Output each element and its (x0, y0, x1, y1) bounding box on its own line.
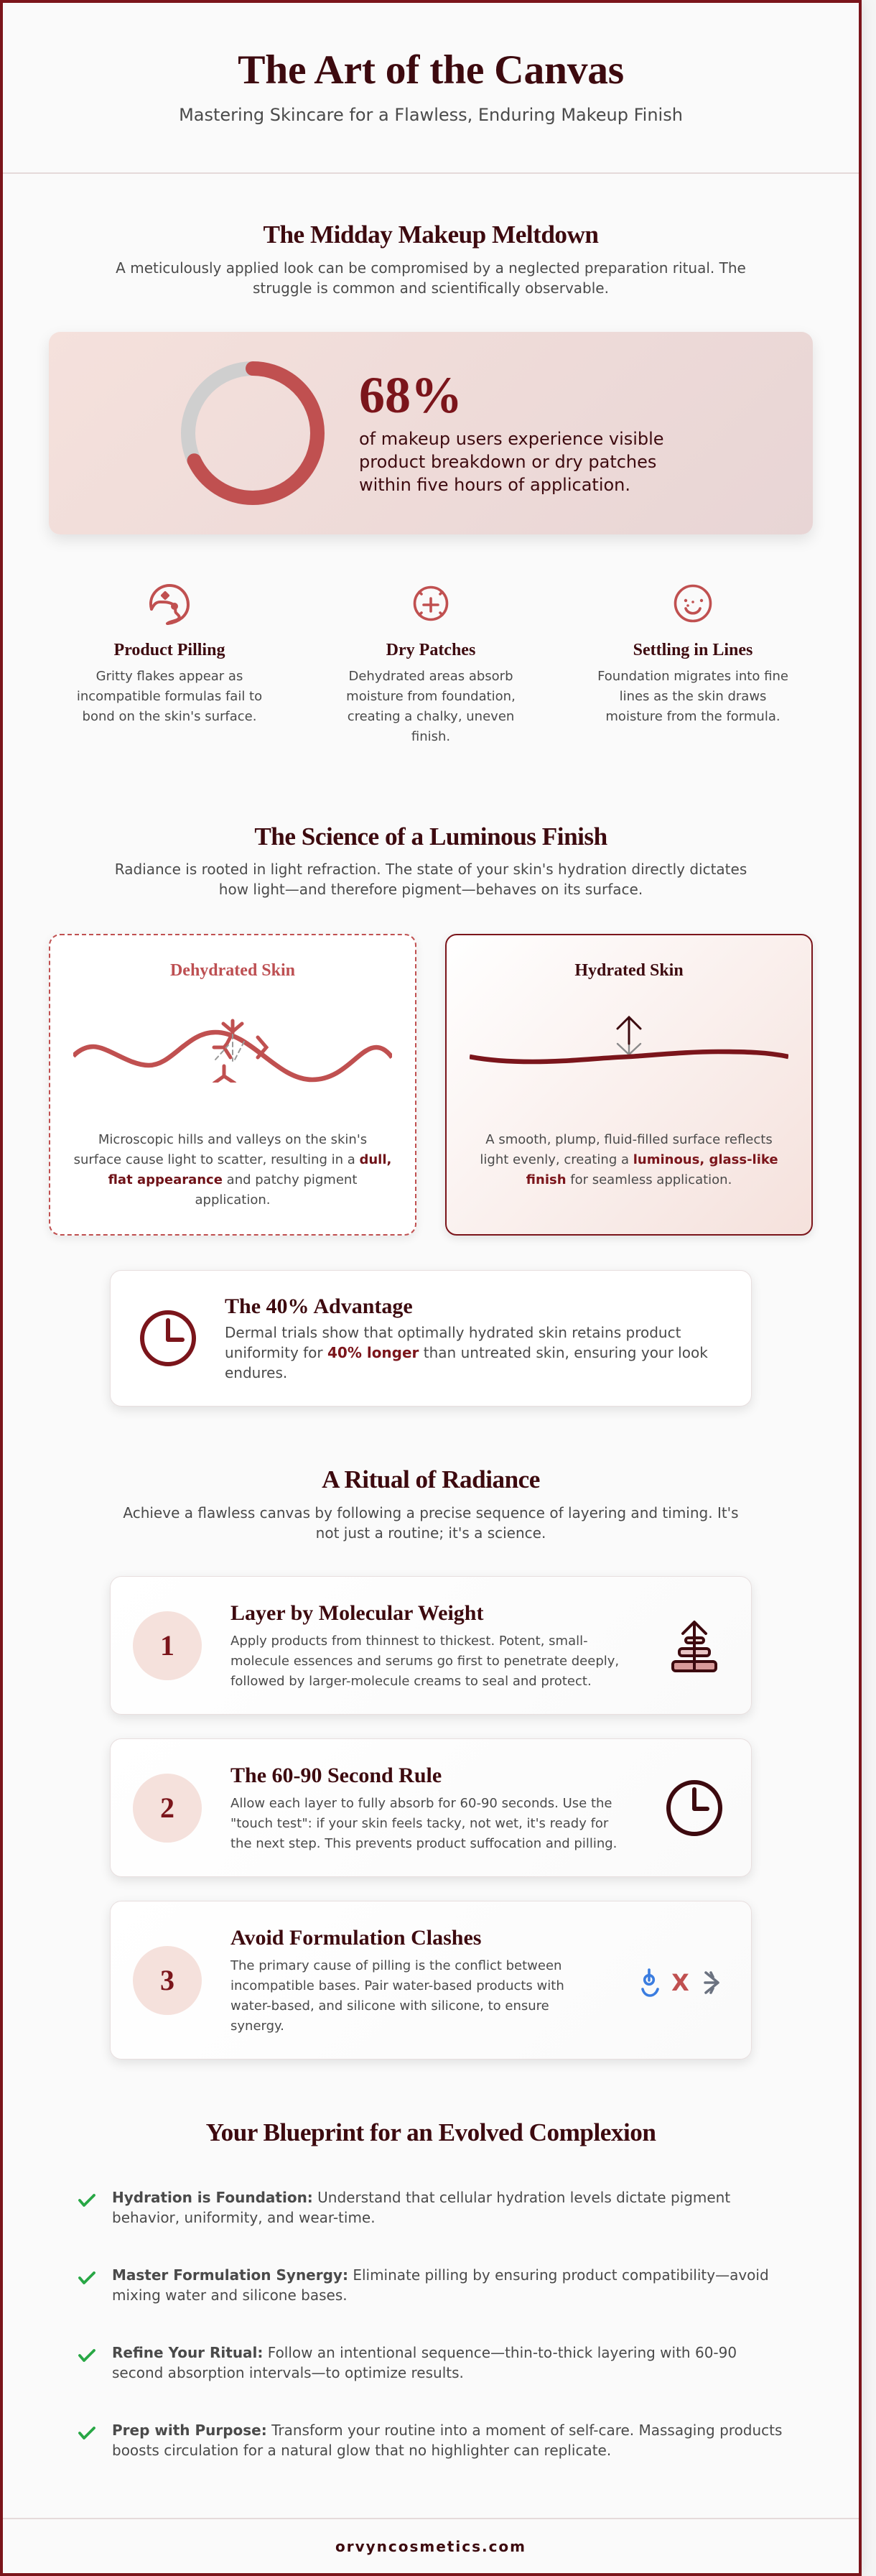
text: step 3: synergy. (230, 2019, 284, 2034)
takeaway 4: Prep with Purpose: Transform your routine into a moment of self-care. Massaging products (112, 2422, 782, 2439)
takeaway 2: Master Formulation Synergy: Eliminate pilling by ensuring product compatibility—avoid (112, 2266, 769, 2284)
title: The Art of the Canvas (238, 47, 624, 93)
text: dry patches: finish. (411, 729, 450, 744)
stat description: within five hours of application. (359, 475, 630, 495)
panel: dehydrated skin (49, 934, 416, 1236)
step number 2: 2 (160, 1792, 174, 1824)
icon: check 2 (78, 2271, 95, 2284)
text: product pilling: Gritty flakes appear as (96, 669, 243, 684)
step number 3 (133, 1946, 202, 2015)
intro text: meltdown: struggle is common and scientifically observable. (253, 279, 609, 297)
donut chart: 68% (181, 361, 325, 505)
takeaway 3: second absorption intervals—to optimize results. (112, 2364, 464, 2381)
panel: 40% advantage (110, 1270, 752, 1407)
icon: check 1 (78, 2194, 95, 2207)
icon: clock (666, 1780, 722, 1836)
heading: 40% advantage: The 40% Advantage (225, 1294, 413, 1318)
text: settling in lines: moisture from the formula. (605, 709, 781, 724)
text: product pilling: incompatible formulas fail to (77, 689, 262, 704)
text: product pilling: bond on the skin's surface. (83, 709, 256, 724)
text: 40% advantage: uniformity for 40% longer than untreated skin, ensuring your look (225, 1344, 708, 1361)
icon: check 4 (78, 2427, 95, 2440)
text: dry patches (346, 669, 516, 744)
panel: hydrated skin (445, 934, 813, 1236)
text: hydrated skin: finish for seamless application. (526, 1172, 732, 1187)
takeaway 2 (112, 2266, 769, 2304)
text: step 2: Allow each layer to fully absorb for 60-90 seconds. Use the (230, 1796, 612, 1811)
stat description (359, 429, 664, 495)
text: hydrated skin: A smooth, plump, fluid-filled surface reflects (485, 1132, 773, 1147)
panel: 68% stat (49, 332, 813, 534)
takeaway 1: Hydration is Foundation: Understand that cellular hydration levels dictate pigment (112, 2189, 730, 2206)
label: product pilling: Product Pilling (114, 641, 225, 659)
text: 40% advantage: Dermal trials show that optimally hydrated skin retains product (225, 1324, 681, 1341)
intro text: science (115, 861, 747, 898)
text: settling in lines (597, 669, 788, 724)
icon: water and silicone clash: X (671, 1969, 689, 1996)
text: step 1 (230, 1634, 619, 1689)
intro text: meltdown: A meticulously applied look can be compromised by a neglected preparation ritual. The (116, 259, 746, 277)
icon: settling in lines (674, 585, 712, 622)
text: step 3 (230, 1958, 564, 2034)
text: dehydrated skin: surface cause light to scatter, resulting in a dull, (74, 1152, 391, 1167)
icon: check 3 (78, 2349, 95, 2362)
intro text: ritual: Achieve a flawless canvas by following a precise sequence of layering and timing. It's (123, 1504, 739, 1521)
text: dry patches: Dehydrated areas absorb (348, 669, 513, 684)
text: dehydrated skin: flat appearance and patchy pigment (108, 1172, 357, 1187)
intro text: science: Radiance is rooted in light refraction. The state of your skin's hydration directly dictates (115, 861, 747, 878)
text: settling in lines: lines as the skin draws (620, 689, 766, 704)
text: dry patches: moisture from foundation, (346, 689, 516, 704)
text: dehydrated skin: Microscopic hills and valleys on the skin's (98, 1132, 367, 1147)
takeaway 4 (112, 2422, 782, 2459)
intro text: meltdown (116, 259, 746, 297)
text: dehydrated skin (74, 1132, 391, 1208)
icon: product pilling (149, 584, 190, 625)
label: settling in lines: Settling in Lines (633, 641, 752, 659)
text: step 1: molecule essences and serums go first to penetrate deeply, (230, 1654, 619, 1669)
step number 3: 3 (160, 1964, 174, 1996)
takeaway 1: behavior, uniformity, and wear-time. (112, 2209, 376, 2226)
diagram: smooth skin reflecting light (470, 1016, 788, 1065)
text: product pilling (77, 669, 262, 724)
panel: step 1 (110, 1576, 752, 1715)
icon: layers (671, 1621, 717, 1672)
text: step 3: The primary cause of pilling is the conflict between (230, 1958, 562, 1973)
step number 1 (133, 1611, 202, 1680)
heading: hydrated skin: Hydrated Skin (574, 961, 684, 980)
heading: step 3: Avoid Formulation Clashes (230, 1926, 481, 1950)
text: step 2: "touch test": if your skin feels tacky, not wet, it's ready for (230, 1816, 608, 1831)
takeaway 2: mixing water and silicone bases. (112, 2287, 348, 2304)
text: dry patches: creating a chalky, uneven (348, 709, 514, 724)
takeaway 3 (112, 2344, 737, 2381)
text: 40% advantage (225, 1324, 708, 1381)
heading: dehydrated skin: Dehydrated Skin (170, 961, 295, 980)
icon: clock (140, 1310, 196, 1366)
heading: step 2: The 60-90 Second Rule (230, 1764, 442, 1787)
diagram: rough skin scattering light (73, 1019, 392, 1083)
intro text: ritual: not just a routine; it's a science. (316, 1524, 546, 1542)
intro text: ritual (123, 1504, 739, 1542)
text: step 3: water-based, and silicone with silicone, to ensure (230, 1998, 549, 2014)
text: settling in lines: Foundation migrates into fine (597, 669, 788, 684)
step number 1: 1 (160, 1629, 174, 1662)
text: hydrated skin: light evenly, creating a luminous, glass-like (480, 1152, 778, 1167)
heading: blueprint: Your Blueprint for an Evolved Complexion (206, 2118, 656, 2146)
stat number: 68% (359, 366, 462, 424)
stat description: product breakdown or dry patches (359, 452, 656, 472)
panel: step 2 (110, 1738, 752, 1877)
icon: dry patches (414, 586, 448, 621)
panel: step 3 (110, 1901, 752, 2060)
text: step 2: the next step. This prevents product suffocation and pilling. (230, 1836, 617, 1851)
text: step 1: Apply products from thinnest to thickest. Potent, small- (230, 1634, 588, 1649)
footer: website: orvyncosmetics.com (335, 2538, 526, 2555)
heading: ritual of radiance: A Ritual of Radiance (322, 1465, 540, 1493)
heading: step 1: Layer by Molecular Weight (230, 1601, 484, 1625)
takeaway 1 (112, 2189, 730, 2226)
icon: water and silicone clash (641, 1968, 719, 1997)
intro text: science: how light—and therefore pigment—behaves on its surface. (219, 881, 643, 898)
takeaway 3: Refine Your Ritual: Follow an intentional sequence—thin-to-thick layering with 60-90 (112, 2344, 737, 2361)
step number 2 (133, 1774, 202, 1843)
text: hydrated skin (480, 1132, 778, 1187)
text: step 1: followed by larger-molecule creams to seal and protect. (230, 1674, 592, 1689)
takeaway 4: boosts circulation for a natural glow that no highlighter can replicate. (112, 2442, 611, 2459)
text: dehydrated skin: application. (195, 1192, 270, 1208)
subtitle: Mastering Skincare for a Flawless, Enduring Makeup Finish (179, 105, 683, 125)
heading: science of a luminous finish: The Science of a Luminous Finish (254, 823, 607, 851)
stat description: of makeup users experience visible (359, 429, 664, 449)
label: dry patches: Dry Patches (386, 641, 475, 659)
text: step 2 (230, 1796, 617, 1851)
text: 40% advantage: endures. (225, 1364, 287, 1381)
text: step 3: incompatible bases. Pair water-based products with (230, 1978, 564, 1993)
heading: midday makeup meltdown: The Midday Makeup Meltdown (264, 221, 598, 249)
